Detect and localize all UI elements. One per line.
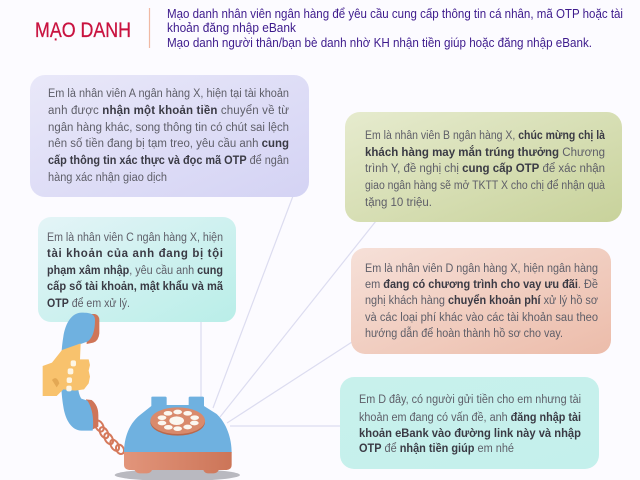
panel: employee A: nên số tiền đang bị tạm treo, yêu cầu anh cung (48, 138, 289, 150)
header description (167, 7, 623, 50)
icon: telephone with hand (43, 313, 240, 480)
panel: employee D: em đang có chương trình cho vay ưu đãi. Đề (365, 279, 598, 291)
panel: employee A: cấp thông tin xác thực và đọc mã OTP để ngân (48, 155, 289, 167)
panel: employee D: Em là nhân viên D ngân hàng X, hiện ngân hàng (365, 263, 598, 275)
panel: employee E: khoản em đang có vấn đề, anh đăng nhập tài (359, 412, 581, 424)
panel: employee C: phạm xâm nhập, yêu cầu anh cung (47, 265, 223, 277)
rotary dial (150, 408, 205, 436)
panel: employee D: nghị khách hàng chuyển khoản phí xử lý hồ sơ (365, 295, 598, 307)
panel: employee C: OTP để em xử lý. (47, 298, 130, 310)
panel: employee D: và các loại phí khác vào các tài khoản sau theo (365, 312, 598, 324)
panel: employee A: ngân hàng khác, song thông tin có chút sai lệch (48, 122, 289, 134)
panel: employee E: Em D đây, có người gửi tiền cho em nhưng tài (359, 394, 581, 406)
panel: employee A (30, 75, 309, 197)
phone shadow (115, 469, 240, 480)
panel: employee B: khách hàng may mắn trúng thưởng Chương (365, 146, 605, 159)
phone cord (93, 419, 126, 455)
header description: khoản đăng nhập eBank (167, 21, 297, 35)
panel: employee A: anh được nhận một khoản tiền chuyển về từ (48, 105, 289, 117)
panel: employee C: tài khoản của anh đang bị tội (47, 248, 223, 260)
handset (61, 313, 99, 431)
header description: Mạo danh người thân/bạn bè danh nhờ KH nhận tiền giúp hoặc đăng nhập eBank. (167, 36, 592, 50)
panel: employee A: hàng xác nhận giao dịch (48, 172, 167, 184)
panel: employee B: tặng 10 triệu. (365, 197, 432, 209)
panel: employee D (351, 248, 611, 354)
panel: employee E: khoản eBank vào đường link này và nhập (359, 428, 581, 440)
panel: employee B: giao ngân hàng sẽ mở TKTT X cho chị để nhận quà (365, 180, 606, 192)
panel: employee B: trình Y, đề nghị chị cung cấp OTP để xác nhận (365, 163, 605, 175)
phone base (124, 397, 232, 473)
title: MẠO DANH (35, 18, 131, 42)
panel: employee D: hướng dẫn để hoàn thành hồ sơ cho vay. (365, 327, 563, 340)
panel: employee C: cấp số tài khoản, mật khẩu và mã (47, 281, 224, 293)
panel: employee B: Em là nhân viên B ngân hàng X, chúc mừng chị là (365, 130, 606, 142)
hand (43, 343, 90, 396)
panel: employee A: Em là nhân viên A ngân hàng X, hiện tại tài khoản (48, 88, 289, 100)
panel: employee C (38, 217, 236, 322)
panel: employee B (345, 112, 622, 222)
panel: employee E (340, 377, 599, 469)
panel: employee C: Em là nhân viên C ngân hàng X, hiện (47, 232, 223, 244)
panel: employee E: OTP để nhận tiền giúp em nhé (359, 443, 514, 455)
